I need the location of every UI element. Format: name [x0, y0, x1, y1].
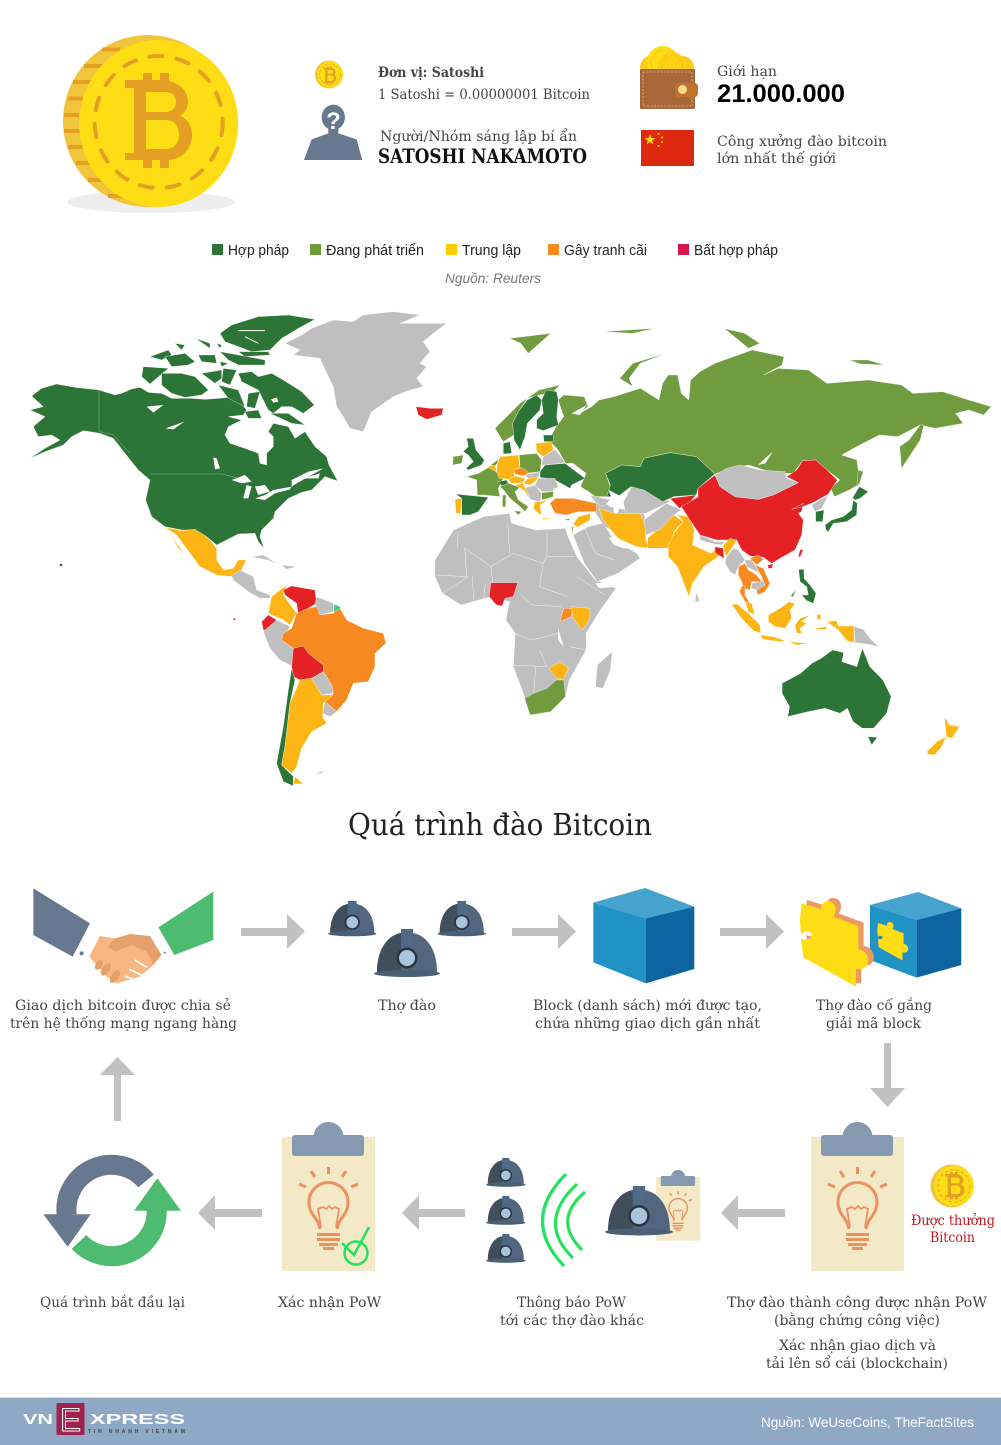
step: miners [328, 901, 486, 1014]
logo: VnExpress [23, 1402, 185, 1438]
text: founder [378, 127, 587, 168]
arrow up [100, 1057, 135, 1121]
text: founder: SATOSHI NAKAMOTO [378, 144, 587, 168]
step: proof of work [727, 1122, 995, 1372]
icon: bitcoin reward coin [930, 1164, 974, 1208]
legend: Bất hợp pháp [694, 242, 778, 259]
arrow right 2 [512, 914, 576, 949]
legend [212, 242, 778, 259]
logo: VnExpress: VN [23, 1411, 53, 1428]
footer source: Nguồn: WeUseCoins, TheFactSites [761, 1414, 974, 1430]
world map [30, 312, 991, 786]
icon: mystery person [304, 105, 362, 160]
caption [816, 996, 932, 1032]
arrow right 1 [241, 914, 305, 949]
icon: small satoshi coin [315, 60, 343, 88]
map: africa, russia, central and south asia, oceania [435, 328, 991, 755]
text: supply limit: 21.000.000 [717, 80, 845, 108]
icon: clipboard with check [282, 1122, 375, 1271]
caption: tải lên sổ cái (blockchain) [766, 1354, 948, 1372]
icon: miner helmet left [328, 901, 377, 936]
caption: Xác nhận PoW [278, 1295, 382, 1311]
legend: Đang phát triển [326, 242, 424, 259]
icon: miner helmet center [374, 929, 440, 977]
icon: blue cube [593, 888, 694, 983]
text: largest mining country [717, 133, 887, 167]
icon: wallet with coins [640, 46, 698, 109]
map: north america [30, 315, 338, 548]
caption: Thợ đào cố gắng [816, 996, 932, 1014]
icon: large bitcoin coin [63, 35, 238, 213]
caption: Quá trình bắt đầu lại [40, 1293, 186, 1311]
arrow left 2 [402, 1195, 465, 1230]
arrow right 3 [720, 914, 784, 949]
icon: three miners [486, 1158, 526, 1263]
caption: Xác nhận giao dịch và [779, 1337, 936, 1354]
icon: signal waves [542, 1174, 585, 1266]
step: shared transaction [10, 888, 237, 1032]
caption [727, 1294, 988, 1372]
footer [0, 1397, 1001, 1445]
icon: cycle arrows [43, 1165, 181, 1256]
icon: handshake [33, 888, 213, 985]
caption: giải mã block [826, 1015, 922, 1032]
text: satoshi unit [378, 65, 590, 103]
map: greenland, central and south america [60, 312, 447, 786]
logo: VnExpress: TIN NHANH VIETNAM [88, 1429, 185, 1435]
map: europe [453, 385, 610, 536]
legend: Trung lập [462, 242, 521, 259]
arrow left 3 [198, 1195, 262, 1230]
reward label [911, 1212, 995, 1246]
reward label: Được thưởng [911, 1212, 995, 1229]
text: founder: Người/Nhóm sáng lập bí ẩn [380, 127, 577, 145]
icon: clipboard with bulb [811, 1122, 904, 1271]
step: restart [40, 1165, 186, 1311]
icon: small clipboard [656, 1170, 700, 1241]
legend: Hợp pháp [228, 242, 289, 259]
caption [533, 998, 762, 1032]
legend: Gây tranh cãi [564, 242, 647, 259]
logo: VnExpress: E [60, 1402, 81, 1438]
text: largest mining country: lớn nhất thế giới [717, 150, 837, 167]
icon: cube with puzzle [800, 892, 961, 987]
step: broadcast proof [486, 1158, 700, 1329]
text: supply limit [717, 64, 845, 108]
heading: mining process: Quá trình đào Bitcoin [348, 808, 652, 843]
caption: Thợ đào thành công được nhận PoW [727, 1294, 988, 1311]
text: supply limit: Giới hạn [717, 64, 777, 80]
reward label: Bitcoin [930, 1230, 975, 1246]
map: east and southeast asia [681, 460, 878, 647]
icon: miner helmet right [438, 901, 486, 936]
caption: (bằng chứng công việc) [774, 1311, 940, 1329]
step: solve block [800, 892, 961, 1032]
text: largest mining country: Công xưởng đào bitcoin [717, 133, 887, 150]
caption: trên hệ thống mạng ngang hàng [10, 1015, 237, 1032]
caption: chứa những giao dịch gần nhất [535, 1015, 760, 1032]
icon: china flag [641, 130, 694, 166]
caption: tới các thợ đào khác [500, 1312, 644, 1329]
caption: Thông báo PoW [517, 1295, 627, 1311]
logo: VnExpress: XPRESS [90, 1411, 185, 1428]
caption: Block (danh sách) mới được tạo, [533, 998, 762, 1014]
text: satoshi unit: 1 Satoshi = 0.00000001 Bitcoin [378, 87, 590, 103]
text: satoshi unit: Đơn vị: Satoshi [378, 65, 484, 81]
step: verify proof [278, 1122, 382, 1311]
caption [10, 997, 237, 1032]
caption: Thợ đào [378, 997, 436, 1014]
icon: mystery person: ? [326, 108, 341, 135]
map source note: Nguồn: Reuters [445, 271, 541, 286]
step: new block [533, 888, 762, 1032]
caption: Giao dịch bitcoin được chia sẻ [15, 997, 231, 1014]
icon: miner with proof [605, 1186, 673, 1235]
arrow left 1 [721, 1195, 785, 1230]
arrow down [870, 1043, 905, 1107]
caption [500, 1295, 644, 1329]
